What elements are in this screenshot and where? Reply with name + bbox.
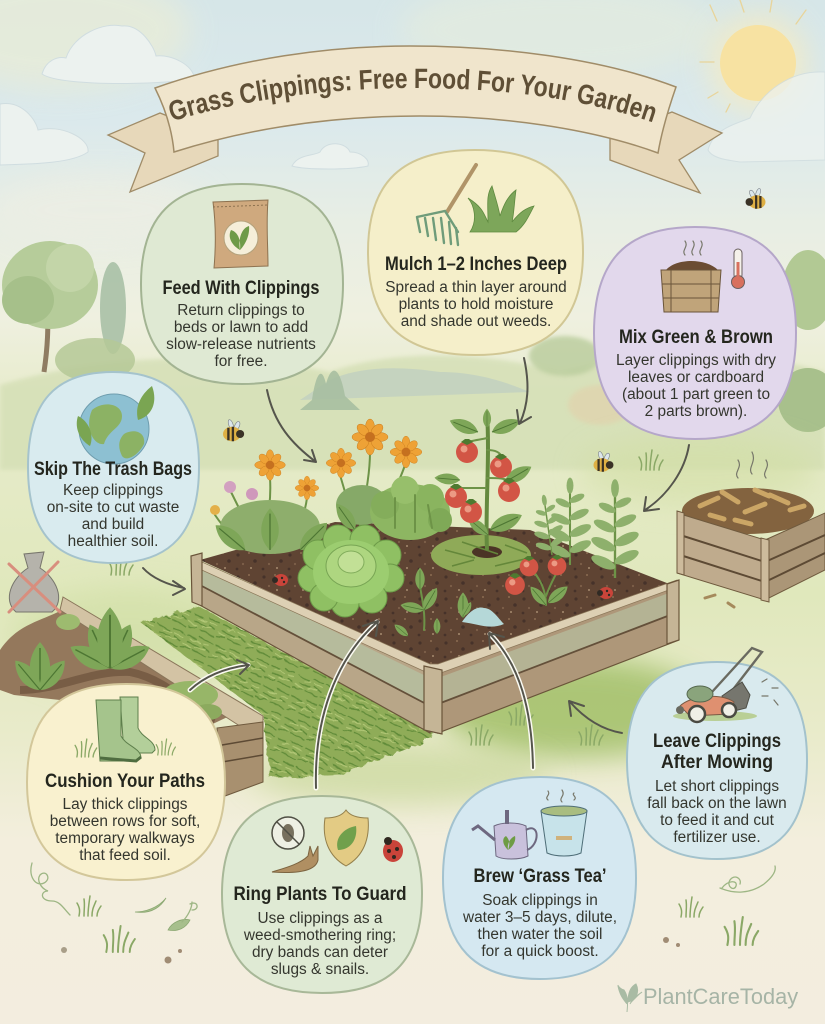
heading: Skip The Trash Bags [34,459,192,480]
body text: Use clippings as a [258,910,383,927]
heading: Brew ‘Grass Tea’ [474,866,606,887]
leaf litter near compost [705,595,734,607]
body text: Keep clippings [63,482,163,499]
body text: Spread a thin layer around [385,279,567,296]
body text: Soak clippings in [482,892,598,909]
arrow: ring to bed [316,621,378,788]
body text: slugs & snails. [271,961,369,978]
body text: for a quick boost. [481,943,599,960]
title banner [106,45,724,194]
panel: mulch [368,150,583,355]
arrow: cushion to mat [190,660,249,690]
bees [223,420,613,472]
body text: healthier soil. [68,533,158,550]
icon: fertilizer bag [213,200,268,268]
body text: on-site to cut waste [47,499,179,516]
flowers in bed [210,419,422,556]
ladybugs in bed [272,574,613,599]
body text: water 3–5 days, dilute, [462,909,617,926]
small bed left with plants [0,597,263,796]
body text: Lay thick clippings [63,796,188,813]
seedlings and watering splash [392,568,504,639]
icon: compost crate [661,241,721,312]
heading: Cushion Your Paths [45,771,205,792]
heading: two lines [653,731,781,773]
clouds [0,25,825,169]
panel: leave clippings after mowing [627,648,807,859]
crossed-out trash bag [9,552,60,612]
body text: beds or lawn to add [174,319,308,336]
heading: Ring Plants To Guard [234,884,406,905]
body text: leaves or cardboard [628,369,764,386]
body text: fall back on the lawn [647,795,787,812]
icon: beetle in crossed circle [272,817,304,849]
panel: cushion your paths [27,684,225,880]
body text: Let short clippings [655,778,779,795]
body text: (about 1 part green to [622,386,770,403]
heading: Feed With Clippings [162,278,320,299]
grass clipping mat [140,607,433,778]
meadow grass patches [10,435,820,805]
arrow: mix to compost [644,445,689,511]
icon: slug [272,846,318,872]
body text: that feed soil. [79,847,171,864]
arrow: brew to bed [489,633,533,768]
body text: between rows for soft, [50,813,200,830]
body text: dry bands can deter [252,944,388,961]
title: Grass Clippings: Free Food For Your Garden [169,68,656,122]
icon: rake [417,165,476,245]
banner main ribbon [155,46,676,153]
panel: skip the trash bags [28,372,199,563]
body text: 2 parts brown). [645,403,747,420]
arrows [143,358,689,788]
icon: ladybug [383,837,403,862]
arrow: skip to bed [143,568,185,595]
heading: two lines: After Mowing [661,752,773,773]
watermark logo: PlantCareToday [643,984,798,1009]
icon: globe [77,386,154,464]
body text: temporary walkways [55,830,195,847]
bee top right [746,188,766,209]
distant hills and trees [0,241,825,470]
corner posts [424,666,442,734]
soil [200,522,672,668]
heading: two lines: Leave Clippings [653,731,781,752]
body text: then water the soil [478,926,602,943]
panel: feed with clippings [141,184,343,384]
icon: shield [324,810,368,866]
body text: Return clippings to [177,302,305,319]
heading: Mulch 1–2 Inches Deep [385,254,567,275]
panel: brew grass tea [443,777,636,979]
lettuce back [370,476,452,540]
decorative leaves and curls at bottom [31,863,775,964]
body text: Layer clippings with dry [616,352,776,369]
tomato plant [431,409,535,575]
body text: for free. [214,353,268,370]
icon: lawn mower [673,648,778,722]
icon: thermometer [732,249,744,288]
lettuce front [298,525,404,617]
body text: slow-release nutrients [166,336,316,353]
sun [700,0,808,113]
arrow: mulch to tomato [517,358,531,424]
icon: grass tuft [468,186,534,232]
sky wash variations [0,0,720,245]
body text: to feed it and cut [660,812,775,829]
right front boards [438,584,679,733]
body text: and shade out weeds. [401,313,551,330]
panel: mix green and brown [594,227,796,439]
arrow: feed to bed [267,390,316,462]
rim [193,558,677,674]
banner left tail [108,113,218,192]
banner right tail [610,112,722,193]
heading: Mix Green & Brown [619,327,773,348]
icon: rubber boots [75,697,175,761]
panel: ring plants to guard [222,796,422,993]
arrow: leave to lawn [569,701,622,733]
left front boards [193,560,430,733]
raised garden bed [191,522,679,734]
body text: fertilizer use. [673,829,761,846]
icon: bucket [541,790,587,856]
body text: and build [82,516,144,533]
compost bin right [677,452,825,602]
body text: weed-smothering ring; [243,927,396,944]
carrot plants and small tomatoes [505,478,641,608]
icon: watering can [472,810,537,859]
body text: plants to hold moisture [399,296,553,313]
